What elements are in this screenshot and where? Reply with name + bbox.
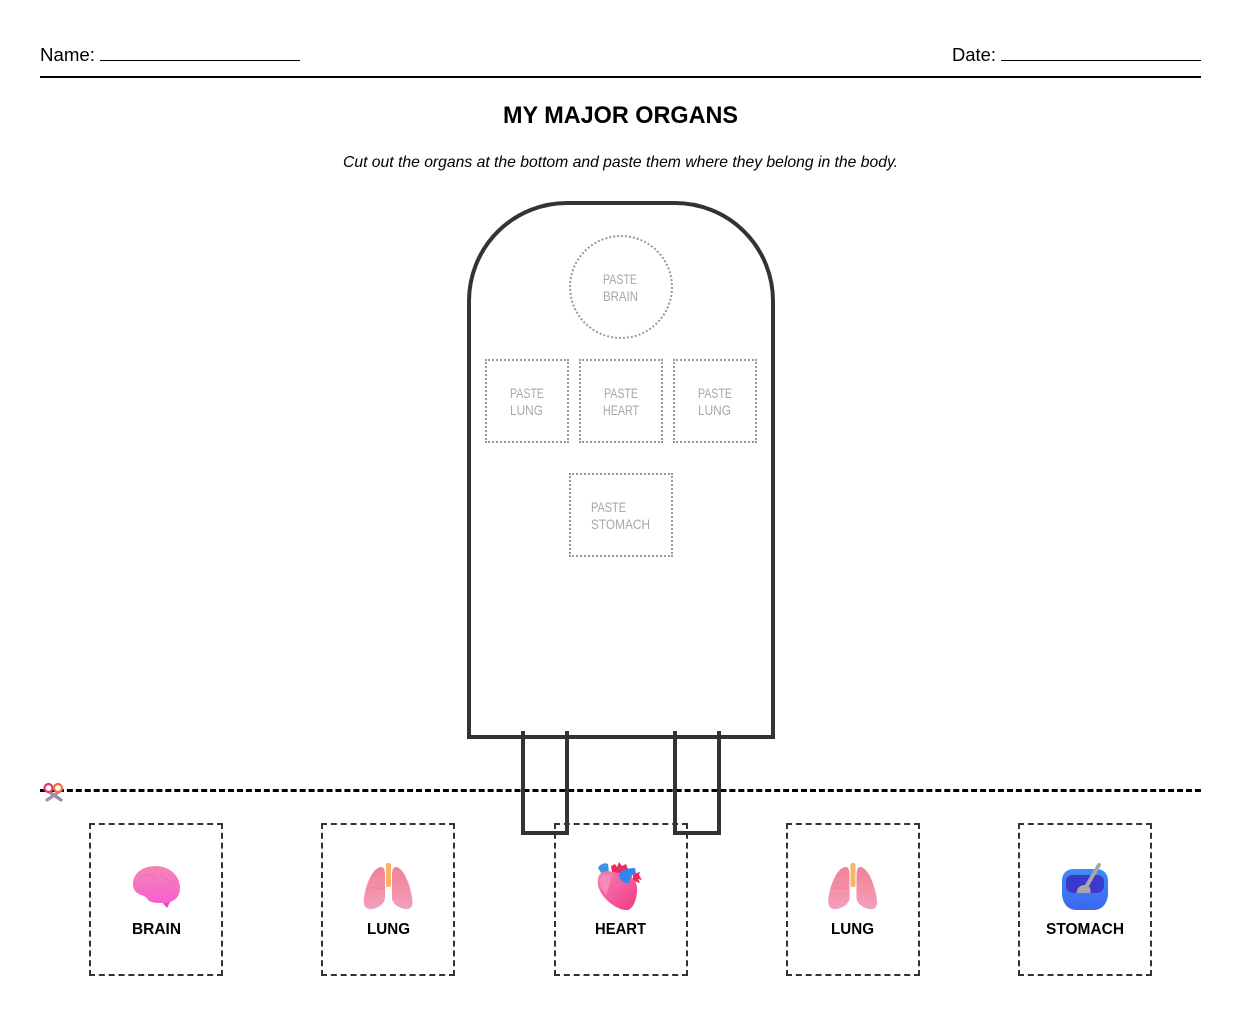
paste zone: right lung: LUNG [698,402,731,418]
paste zone: right lung: PASTE [698,385,732,401]
title: MY MAJOR ORGANS [503,102,738,129]
left leg [521,731,569,835]
icon: brain [133,866,180,908]
paste zone: heart [579,359,663,443]
paste zone: stomach: STOMACH [591,516,650,532]
date field: Date: [952,45,996,65]
paste zone: stomach [569,473,673,557]
card: brain [89,823,223,976]
name field: Name: [40,45,95,65]
header rule [40,76,1201,78]
label: LUNG [831,921,874,938]
card: lung [321,823,455,976]
icon: lungs [828,863,877,909]
paste zone: stomach: PASTE [591,499,626,515]
label: HEART [595,921,646,938]
label: BRAIN [132,921,181,938]
paste zone: brain: PASTE [603,271,637,287]
paste zone: left lung: LUNG [510,402,543,418]
paste zone: heart: PASTE [604,385,638,401]
label: STOMACH [1046,921,1124,938]
card: heart [554,823,688,976]
paste zone: heart: HEART [603,402,639,418]
card: stomach [1018,823,1152,976]
icon: scissors [43,782,64,802]
right leg [673,731,721,835]
instructions: Cut out the organs at the bottom and paste them where they belong in the body. [343,154,898,171]
paste zone: right lung [673,359,757,443]
icon: heart [598,862,642,910]
cut line [40,789,1201,792]
card: lung [786,823,920,976]
paste zone: brain [569,235,673,339]
paste zone: brain: BRAIN [603,288,638,304]
body outline [467,201,775,739]
paste zone: left lung: PASTE [510,385,544,401]
icon: lungs [364,863,413,909]
icon: stomach bowl [1062,865,1108,910]
label: LUNG [367,921,410,938]
paste zone: left lung [485,359,569,443]
